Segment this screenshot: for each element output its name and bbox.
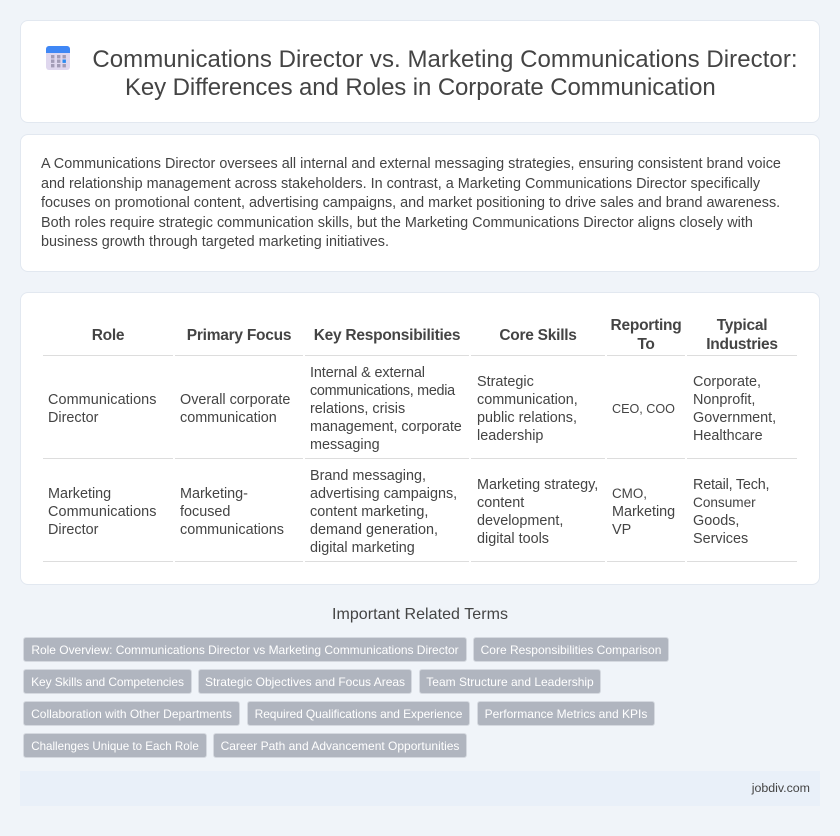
panel: title xyxy=(20,20,820,123)
table row: Marketing Communications Director: advertising campaigns, xyxy=(310,486,457,502)
table row: Marketing Communications Director: demand generation, xyxy=(310,522,438,538)
related terms tags: Collaboration with Other Departments xyxy=(31,707,232,721)
footer source label: jobdiv.com xyxy=(752,781,810,795)
related terms tags: Key Skills and Competencies xyxy=(31,675,184,689)
related terms tags: Team Structure and Leadership xyxy=(426,675,594,689)
intro text: and relationship management across stakeholders. In contrast, a Marketing Communications Director specifically xyxy=(41,176,760,192)
table row: Marketing Communications Director: Services xyxy=(693,531,748,547)
related terms tags: Performance Metrics and KPIs xyxy=(485,707,647,721)
related terms tags: Role Overview: Communications Director vs Marketing Communications Director xyxy=(31,643,459,657)
related terms tags: Strategic Objectives and Focus Areas xyxy=(205,675,405,689)
table header: Industries xyxy=(706,336,778,353)
table header xyxy=(92,317,778,353)
table row: Marketing Communications Director xyxy=(48,468,769,556)
table row: Communications Director xyxy=(48,365,776,453)
table row: Communications Director: Internal & external xyxy=(310,365,425,381)
table row: Marketing Communications Director: focused xyxy=(180,504,230,520)
table row: Marketing Communications Director: development, xyxy=(477,513,563,529)
intro text: focuses on promotional content, advertising campaigns, and market positioning to drive sales and brand awareness. xyxy=(41,195,780,211)
table row: Marketing Communications Director: Brand messaging, xyxy=(310,468,426,484)
table header: Core Skills xyxy=(499,327,577,344)
table row: Marketing Communications Director: digital tools xyxy=(477,531,549,547)
related terms tags xyxy=(23,637,669,758)
panel: intro xyxy=(20,134,820,272)
panel: comparison table xyxy=(20,292,820,585)
table row: Marketing Communications Director: Consumer xyxy=(693,495,756,510)
intro text: A Communications Director oversees all internal and external messaging strategies, ensuring consistent brand voice xyxy=(41,156,781,172)
related terms tags: Core Responsibilities Comparison xyxy=(481,643,661,657)
table row: Marketing Communications Director: content marketing, xyxy=(310,504,428,520)
table row: Marketing Communications Director: Communications xyxy=(48,504,157,520)
intro text: business growth through targeted marketing initiatives. xyxy=(41,234,389,250)
table row: Communications Director: Healthcare xyxy=(693,428,763,444)
table row: Marketing Communications Director: Goods, xyxy=(693,513,739,529)
table row: Marketing Communications Director: communications xyxy=(180,522,284,538)
icon: calendar xyxy=(46,46,70,70)
heading xyxy=(92,46,798,101)
footer bar xyxy=(20,771,820,806)
heading: Key Differences and Roles in Corporate Communication xyxy=(125,74,716,101)
table row: Marketing Communications Director: VP xyxy=(612,522,631,538)
heading: related terms: Important Related Terms xyxy=(332,606,508,623)
table row: Communications Director: communication xyxy=(180,410,277,426)
table row: Communications Director: Strategic xyxy=(477,374,534,390)
related terms tags: Challenges Unique to Each Role xyxy=(31,740,199,753)
related terms tags: Required Qualifications and Experience xyxy=(255,707,462,721)
table row: Communications Director: Corporate, xyxy=(693,374,761,390)
table header: Typical xyxy=(717,317,767,334)
table row: Communications Director: Nonprofit, xyxy=(693,392,755,408)
table row: Communications Director: messaging xyxy=(310,437,380,453)
table header: To xyxy=(637,336,655,353)
table row: Marketing Communications Director: digital marketing xyxy=(310,540,415,556)
table header: Role xyxy=(92,327,124,344)
table row: Communications Director: leadership xyxy=(477,428,543,444)
table row: Communications Director: communication, xyxy=(477,392,578,408)
table row: Communications Director: Director xyxy=(48,410,98,426)
table row: Marketing Communications Director: Marketing xyxy=(48,486,111,502)
table row: Marketing Communications Director: Marketing xyxy=(612,504,675,520)
table row: Communications Director: communications, media xyxy=(310,383,455,399)
intro text: Both roles require strategic communication skills, but the Marketing Communications Director aligns closely with xyxy=(41,214,753,230)
table row: Marketing Communications Director: Retail, Tech, xyxy=(693,477,769,493)
table row: Communications Director: relations, crisis xyxy=(310,401,405,417)
table row: Communications Director: Overall corporate xyxy=(180,392,290,408)
intro text xyxy=(41,156,781,250)
table row: Marketing Communications Director: Marketing strategy, xyxy=(477,477,598,493)
table row: Communications Director: Government, xyxy=(693,410,776,426)
table row: Marketing Communications Director: CMO, xyxy=(612,486,647,501)
table row: Marketing Communications Director: Director xyxy=(48,522,98,538)
table row: Marketing Communications Director: Marketing- xyxy=(180,486,248,502)
table row: Communications Director: Communications xyxy=(48,392,157,408)
heading: Communications Director vs. Marketing Communications Director: xyxy=(92,46,798,73)
table row: Communications Director: public relations, xyxy=(477,410,577,426)
table header: Reporting xyxy=(611,317,681,334)
related terms tags: Career Path and Advancement Opportunities xyxy=(221,739,459,753)
table row: Communications Director: management, corporate xyxy=(310,419,462,435)
table row: Marketing Communications Director: content xyxy=(477,495,524,511)
table row: Communications Director: CEO, COO xyxy=(612,402,675,416)
table header: Key Responsibilities xyxy=(314,327,460,344)
table header: Primary Focus xyxy=(187,327,291,344)
